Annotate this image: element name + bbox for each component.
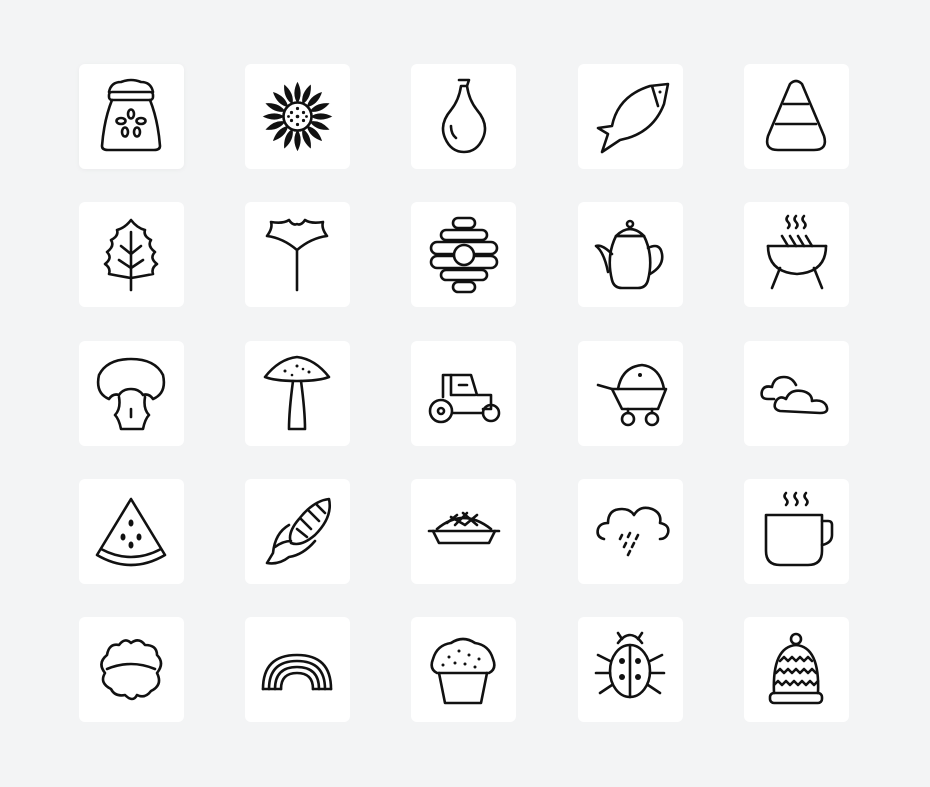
card: ladybug (578, 617, 683, 722)
card: muffin (411, 617, 516, 722)
card: sunflower (245, 64, 350, 169)
card: grill (744, 202, 849, 307)
card: candy corn (744, 64, 849, 169)
card: pie (411, 479, 516, 584)
card: teapot (578, 202, 683, 307)
card: tractor (411, 341, 516, 446)
card: pear (411, 64, 516, 169)
card: leaf (79, 202, 184, 307)
card: rainbow (245, 617, 350, 722)
card: ginkgo (245, 202, 350, 307)
card: beehive (411, 202, 516, 307)
card: mushroom (79, 341, 184, 446)
card: rain cloud (578, 479, 683, 584)
card: mug (744, 479, 849, 584)
card: amanita (245, 341, 350, 446)
card: clouds (744, 341, 849, 446)
card: watermelon (79, 479, 184, 584)
card: cabbage (79, 617, 184, 722)
card: seed bag (79, 64, 184, 169)
card: fish (578, 64, 683, 169)
card: corn (245, 479, 350, 584)
card: beanie (744, 617, 849, 722)
card: wheelbarrow (578, 341, 683, 446)
